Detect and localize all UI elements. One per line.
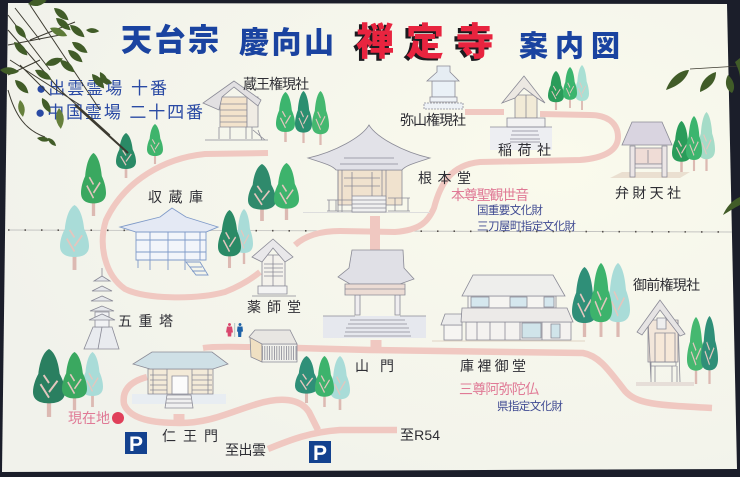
building: San-mon gate (323, 250, 426, 338)
icon: parking west: P (129, 433, 143, 456)
icon: parking east: P (313, 442, 327, 465)
title: 禅定寺 (356, 22, 494, 64)
trees: lower left (33, 349, 103, 417)
building: Gozen Gongen shrine (636, 300, 694, 386)
label: Benzaiten shrine: 弁財天社 (615, 185, 681, 201)
label: Zao Gongen shrine: 蔵王権現社 (243, 76, 309, 92)
label: pagoda: 五重塔 (118, 313, 173, 329)
title: 案内図 (519, 30, 620, 63)
building: five-storied pagoda (84, 268, 119, 349)
paths: pink walkways (103, 112, 712, 449)
trees: Inari group (548, 65, 589, 110)
building: Konpon-do main hall (303, 125, 430, 213)
trees: Benzaiten group (672, 112, 715, 172)
trees: Gozen group (687, 316, 718, 384)
pilgrimage text: ●出雲霊場 十番 (36, 79, 167, 98)
title (121, 22, 620, 66)
pilgrimage text: ●中国霊場 二十四番 (35, 103, 203, 122)
trees: lower centre (295, 356, 350, 410)
marker: current location (112, 412, 124, 424)
label: to Izumo: 至出雲 (225, 442, 266, 458)
label: Amida triad: 三尊阿弥陀仏 (459, 381, 539, 397)
label: current location: 現在地 (68, 410, 110, 426)
icon: restrooms (226, 323, 243, 337)
label: Inari shrine: 稲荷社 (498, 142, 551, 158)
icon: parking east (309, 441, 331, 465)
label: national cultural property: 国重要文化財 (477, 203, 544, 217)
building: restroom shed (249, 330, 297, 362)
pilgrimage text (35, 79, 203, 122)
building: treasure storehouse (120, 208, 218, 275)
trees: Zao group (276, 91, 329, 145)
label: main image: 本尊聖観世音 (451, 187, 529, 203)
label: town cultural property: 三刀屋町指定文化財 (477, 219, 576, 233)
trees: Kuri group (572, 263, 630, 337)
trees: left group (60, 124, 163, 270)
building: Inari shrine (490, 76, 552, 150)
foreground: leaves top right (666, 58, 740, 215)
building: Yakushi-do (252, 239, 296, 296)
icon: parking west (125, 432, 147, 456)
title: 慶向山 (239, 27, 334, 60)
title: 禅定寺 (353, 24, 491, 66)
label: Nio-mon: 仁王門 (162, 428, 218, 444)
label: Misen Gongen shrine: 弥山権現社 (400, 112, 466, 128)
fold line (8, 230, 732, 232)
label: San-mon: 山門 (355, 358, 394, 374)
building: Misen Gongen shrine (424, 66, 463, 109)
building: Zao Gongen shrine (203, 81, 268, 140)
title: 天台宗 (121, 23, 219, 58)
trees: centre left (218, 163, 299, 268)
label: main hall: 根本堂 (418, 170, 471, 186)
label: Kuri-do: 庫裡御堂 (460, 358, 526, 374)
label: prefectural cultural property: 県指定文化財 (497, 399, 564, 413)
foreground: branches and leaves top left (0, 0, 128, 153)
label: Yakushi-do: 薬師堂 (247, 299, 301, 315)
label: Gozen Gongen shrine: 御前権現社 (633, 277, 700, 293)
building: Benzaiten shrine (610, 122, 690, 178)
label: to R54: 至R54 (400, 427, 440, 443)
building: Kuri-do (432, 275, 585, 341)
label: storehouse: 収蔵庫 (148, 189, 203, 205)
building: Nio-mon gate (132, 352, 228, 408)
